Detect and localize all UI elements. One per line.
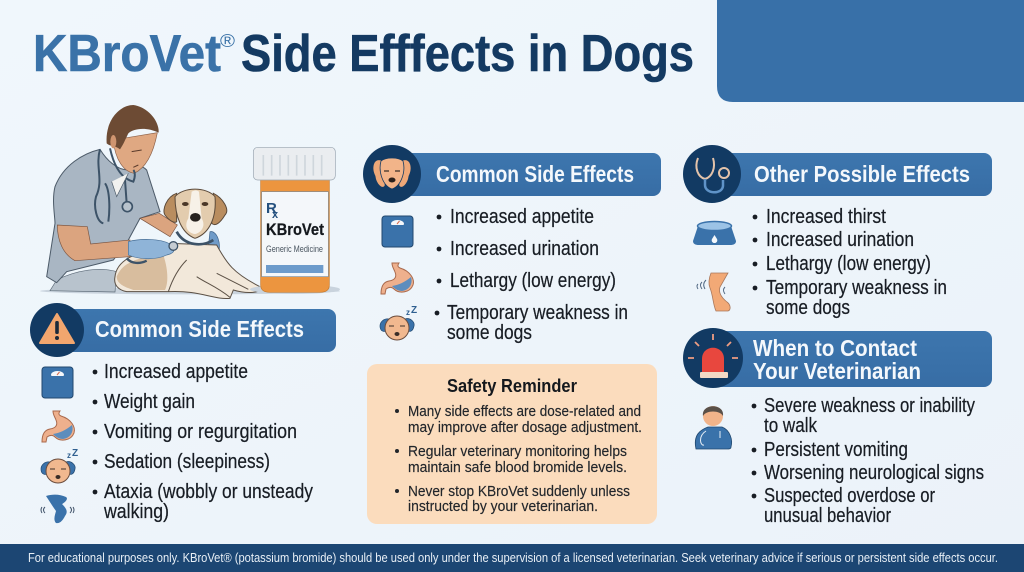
list: Increased appetite — [450, 206, 594, 228]
icon: veterinarian — [695, 406, 732, 449]
medicine bottle: x — [272, 209, 279, 221]
icon: water bowl — [693, 222, 736, 245]
icon: weak leg — [697, 273, 730, 311]
icon: dog face — [363, 145, 421, 203]
title: Side Efffects in Dogs — [241, 25, 694, 83]
list: Persistent vomiting — [764, 439, 908, 461]
heading: Common Side Effects — [436, 161, 634, 187]
list: Temporary weakness in — [766, 277, 947, 299]
heading: Your Veterinarian — [753, 358, 921, 384]
medicine bottle — [250, 147, 340, 294]
list: Sedation (sleepiness) — [104, 451, 270, 473]
list: unusual behavior — [764, 505, 891, 527]
list: walking) — [103, 501, 169, 523]
title: KBroVet — [33, 25, 221, 83]
list: Vomiting or regurgitation — [104, 421, 297, 443]
medicine bottle: KBroVet — [266, 220, 324, 239]
icon: stomach — [42, 411, 74, 442]
header bar — [712, 153, 992, 196]
icon: scale — [42, 367, 73, 398]
medicine bottle: R — [266, 200, 277, 217]
heading — [753, 335, 921, 384]
panel: other possible effects — [683, 145, 992, 319]
header bar — [713, 331, 992, 387]
illustration: veterinarian examining dog — [40, 105, 340, 299]
list: Weight gain — [104, 391, 195, 413]
medicine bottle: Generic Medicine — [266, 244, 323, 255]
reminder list: Many side effects are dose-related and — [408, 404, 641, 420]
footer disclaimer — [0, 544, 1024, 572]
panel: common side effects (middle) — [363, 145, 661, 344]
reminder list: maintain safe blood bromide levels. — [408, 460, 627, 476]
list — [752, 395, 984, 527]
icon: stomach — [381, 263, 413, 294]
list: Increased thirst — [766, 206, 886, 228]
reminder list: may improve after dosage adjustment. — [408, 420, 642, 436]
list: Worsening neurological signs — [764, 462, 984, 484]
icon: stethoscope — [683, 145, 741, 203]
list: Increased appetite — [104, 361, 248, 383]
top right banner block — [717, 0, 1024, 102]
heading: Safety Reminder — [447, 376, 577, 396]
panel: safety reminder — [367, 364, 657, 524]
list: Increased urination — [766, 229, 914, 251]
icon: wobbly dog — [41, 495, 74, 523]
icon: scale — [382, 216, 413, 247]
icon: sleeping dog — [380, 305, 417, 340]
reminder list: Regular veterinary monitoring helps — [408, 444, 627, 460]
title — [33, 25, 694, 83]
panel: common side effects (left) — [30, 303, 336, 523]
list — [753, 206, 947, 319]
list: some dogs — [766, 297, 850, 319]
heading: Common Side Effects — [95, 316, 304, 342]
heading: When to Contact — [753, 335, 917, 361]
list: Suspected overdose or — [764, 485, 935, 507]
reminder list: instructed by your veterinarian. — [408, 499, 598, 515]
list — [93, 361, 313, 523]
reminder list — [395, 404, 642, 515]
list: Temporary weakness in — [447, 302, 628, 324]
list: Lethargy (low energy) — [450, 270, 616, 292]
list: Lethargy (low energy) — [766, 253, 931, 275]
panel: when to contact your veterinarian — [683, 328, 992, 527]
icon: warning triangle — [30, 303, 84, 357]
title: ® — [220, 31, 235, 51]
header bar — [392, 153, 661, 196]
list: Increased urination — [450, 238, 599, 260]
icon: sleeping dog — [41, 448, 78, 483]
heading: Other Possible Effects — [754, 161, 970, 187]
list: Ataxia (wobbly or unsteady — [104, 481, 313, 503]
list: to walk — [764, 415, 818, 437]
list: some dogs — [447, 322, 532, 344]
reminder list: Never stop KBroVet suddenly unless — [408, 484, 630, 500]
icon: siren — [683, 328, 743, 388]
list — [435, 206, 628, 344]
header bar — [57, 309, 336, 352]
list: Severe weakness or inability — [764, 395, 975, 417]
